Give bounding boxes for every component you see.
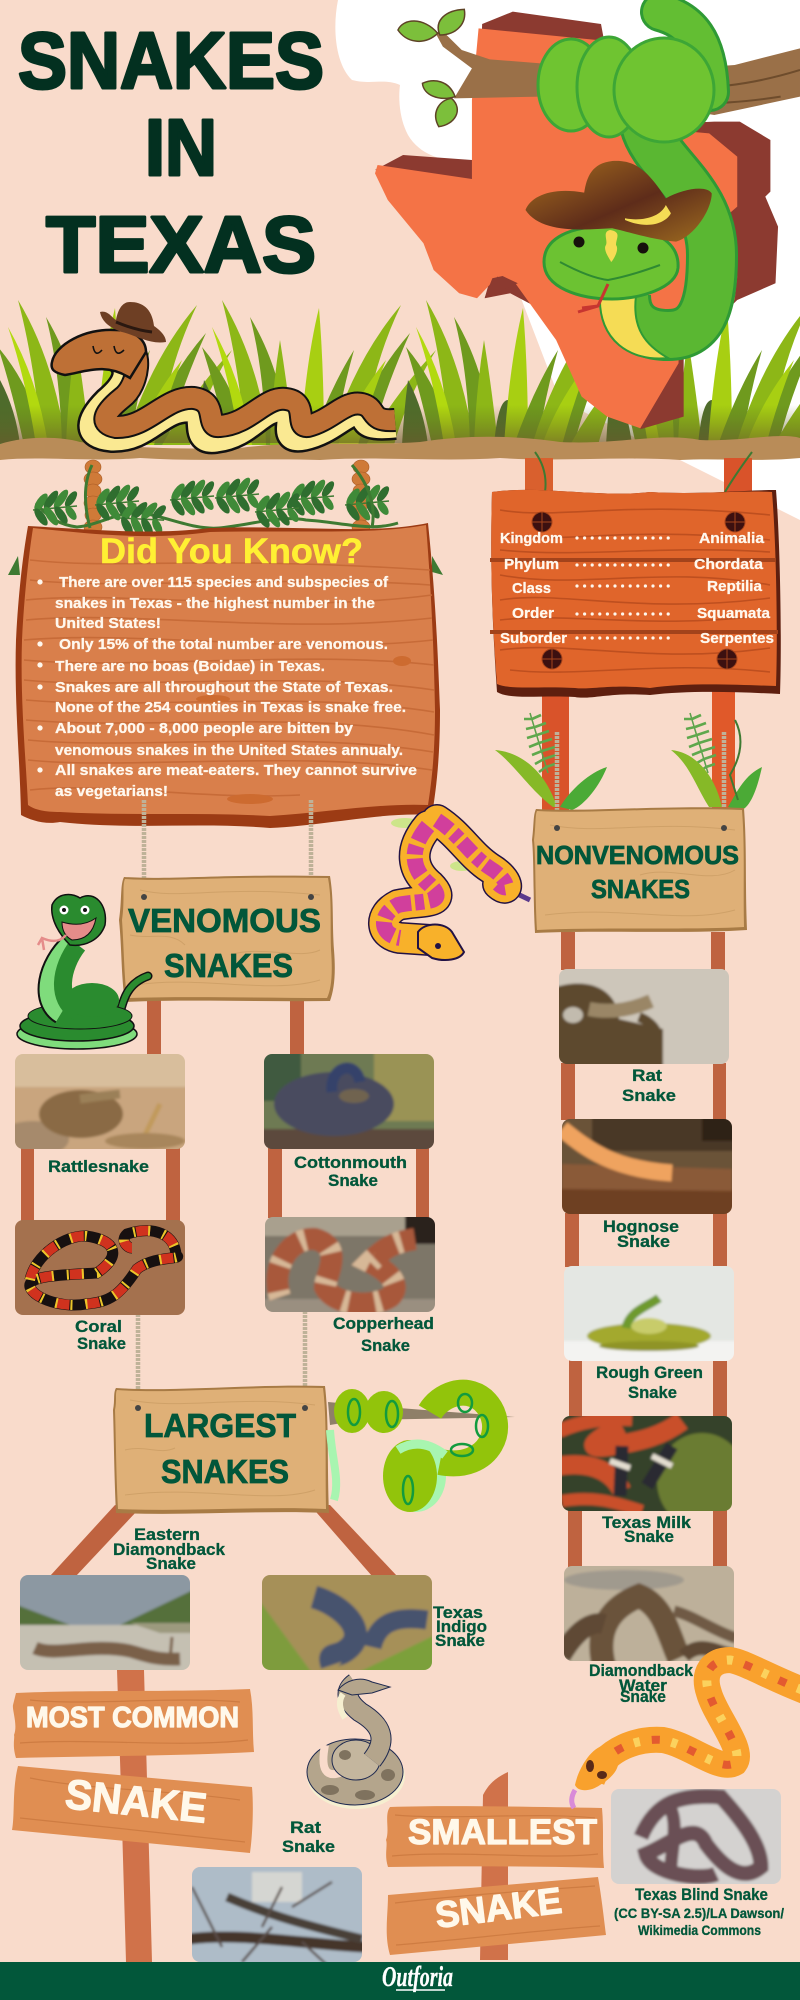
text block: facts list: Only 15% of the total number are venomous. [59, 636, 388, 653]
panel: taxonomy sign [490, 490, 781, 698]
panel: venomous sign: SNAKES [164, 947, 293, 984]
taxonomy table: Animalia [699, 530, 765, 547]
posts under the signs [21, 932, 727, 1567]
title [18, 16, 324, 289]
ropes to the largest sign [138, 1311, 305, 1408]
taxonomy table: Reptilia [707, 578, 763, 595]
labels: nonvenomous snakes [589, 1066, 703, 1706]
text block: facts list: About 7,000 - 8,000 people are bitten by [55, 720, 354, 737]
soil [0, 436, 800, 460]
labels: venomous snakes: Copperhead [333, 1314, 434, 1333]
icon: lime snake on branch [328, 1389, 515, 1512]
labels: common and smallest snakes: Snake [282, 1837, 335, 1856]
footer logo: Outforia [382, 1962, 453, 1993]
labels: venomous snakes: Coral [75, 1317, 122, 1336]
snake head [544, 226, 678, 299]
labels: nonvenomous snakes: Hognose [603, 1217, 679, 1236]
labels: venomous snakes: Cottonmouth [294, 1153, 407, 1172]
sign: snake (most common) [12, 1766, 253, 1853]
panel: nonvenomous sign: SNAKES [591, 874, 690, 904]
labels: nonvenomous snakes: Snake [617, 1232, 670, 1251]
icon: beige rat snake [307, 1679, 405, 1809]
text block: facts list: snakes in Texas - the highest number in the [55, 595, 375, 612]
brown snake with hat [52, 302, 395, 438]
sign: snake (most common): SNAKE [63, 1770, 209, 1832]
panel: nonvenomous sign [532, 807, 747, 933]
labels: nonvenomous snakes: Snake [620, 1687, 666, 1706]
sign: snake (smallest) [387, 1877, 606, 1955]
labels: largest snakes [113, 1525, 487, 1650]
taxonomy table: Chordata [694, 556, 764, 573]
sign: most common: MOST COMMON [26, 1702, 239, 1734]
diagonal posts under largest sign [50, 1505, 397, 1576]
snake belly [600, 296, 668, 358]
taxonomy table: Class [512, 580, 551, 597]
text block: facts list: as vegetarians! [55, 783, 168, 800]
labels: venomous snakes: Snake [361, 1336, 410, 1355]
icon: orange snake [572, 1660, 800, 1808]
photo: texas blind snake [608, 1786, 784, 1887]
labels: nonvenomous snakes: Snake [624, 1527, 674, 1546]
photo: rat snake [556, 966, 732, 1067]
post: most common sign [117, 1670, 152, 1962]
photo: cottonmouth [264, 1054, 434, 1149]
labels: largest snakes: Diamondback [113, 1540, 226, 1559]
sign: smallest [386, 1806, 604, 1868]
labels: common and smallest snakes: Rat [290, 1818, 321, 1837]
labels: venomous snakes: Rattlesnake [48, 1157, 149, 1176]
title: SNAKES [18, 16, 324, 105]
footer band [0, 1962, 800, 2000]
taxonomy table: Order [512, 605, 554, 622]
icon: pink and yellow snake [384, 815, 530, 960]
labels: venomous snakes [48, 1153, 434, 1355]
photo: copperhead [262, 1214, 438, 1315]
text block: facts list: Snakes are all throughout the State of Texas. [55, 679, 393, 696]
labels: largest snakes: Indigo [436, 1617, 487, 1636]
title: TEXAS [46, 200, 316, 289]
text block: facts list: venomous snakes in the United States annualy. [55, 742, 403, 759]
cowboy hat [526, 161, 712, 242]
dotted leaders [577, 538, 673, 638]
ropes to the nonvenomous sign [557, 732, 724, 828]
sign: most common [13, 1689, 254, 1758]
plants beside the posts [495, 713, 762, 810]
snake head with mouth [52, 895, 105, 945]
labels: nonvenomous snakes: Snake [628, 1383, 677, 1402]
taxonomy table: Serpentes [700, 630, 774, 647]
photo: diamondback water snake [564, 1566, 734, 1661]
vine garland [32, 465, 398, 542]
ropes to the venomous sign [144, 800, 311, 897]
labels: nonvenomous snakes: Diamondback [589, 1661, 693, 1680]
text block: facts list: None of the 254 counties in Texas is snake free. [55, 699, 406, 716]
labels: common and smallest snakes: Wikimedia Commons [638, 1922, 761, 1938]
photo: eastern diamondback [20, 1575, 190, 1670]
photo: coral snake [15, 1220, 185, 1315]
labels: largest snakes: Snake [146, 1554, 196, 1573]
brown snake head [52, 330, 146, 378]
posts above the did you know sign [84, 460, 370, 534]
title: IN [145, 103, 217, 192]
photo: rat snake on branch [189, 1864, 365, 1965]
text block: facts list: All snakes are meat-eaters. They cannot survive [55, 762, 417, 779]
texas map illustration [375, 12, 778, 429]
photo: texas indigo snake [259, 1572, 435, 1673]
labels: nonvenomous snakes: Rough Green [596, 1363, 703, 1382]
brown snake hat [100, 302, 166, 343]
heading: nonvenomous snakes: NONVENOMOUS [536, 840, 739, 870]
labels: largest snakes: Eastern [134, 1525, 200, 1544]
labels: largest snakes: Snake [435, 1631, 485, 1650]
heading: venomous snakes: VENOMOUS [128, 902, 321, 939]
white cloud backdrop [335, 0, 800, 520]
panel: did you know sign [8, 523, 443, 828]
labels: nonvenomous snakes: Texas Milk [602, 1513, 692, 1532]
heading: largest snakes: LARGEST [144, 1407, 296, 1444]
text block: facts list: There are no boas (Boidae) in Texas. [55, 658, 325, 675]
photo: hognose snake [559, 1116, 735, 1217]
labels: common and smallest snakes: Texas Blind Snake [635, 1885, 768, 1904]
taxonomy table [500, 530, 774, 647]
labels: nonvenomous snakes: Water [619, 1676, 667, 1695]
taxonomy table: Suborder [500, 630, 567, 647]
taxonomy table: Phylum [504, 556, 559, 573]
green cowboy snake [526, 12, 714, 358]
text block: facts list [38, 574, 417, 800]
branch with leaves [398, 9, 800, 127]
panel: largest sign [113, 1386, 329, 1514]
labels: common and smallest snakes: (CC BY-SA 2.5)/LA Dawson/ [614, 1905, 784, 1921]
labels: venomous snakes: Snake [328, 1171, 378, 1190]
panel: venomous sign [119, 876, 335, 1002]
photo: rough green snake [564, 1266, 734, 1361]
heading: did you know: Did You Know? [100, 532, 363, 571]
sign: smallest: SMALLEST [408, 1813, 597, 1852]
labels: largest snakes: Texas [433, 1603, 483, 1622]
photo: rattlesnake [15, 1054, 185, 1149]
labels: nonvenomous snakes: Rat [632, 1066, 662, 1085]
post: smallest sign [480, 1772, 508, 1960]
text block: facts list: United States! [55, 615, 161, 632]
posts holding the taxonomy sign [525, 452, 752, 810]
taxonomy table: Squamata [697, 605, 771, 622]
sign: snake (smallest): SNAKE [433, 1880, 564, 1936]
sign bolts [532, 512, 745, 669]
text block: facts list: There are over 115 species and subspecies of [59, 574, 389, 591]
labels: venomous snakes: Snake [77, 1334, 126, 1353]
grass strip [0, 300, 800, 445]
panel: largest sign: SNAKES [161, 1453, 289, 1490]
labels: nonvenomous snakes: Snake [622, 1086, 676, 1105]
photo: texas milk snake [562, 1416, 732, 1511]
snake coils on branch [538, 37, 714, 142]
icon: cartoon venomous snake [17, 895, 148, 1049]
labels: common and smallest snakes [282, 1818, 784, 1938]
taxonomy table: Kingdom [500, 530, 563, 547]
